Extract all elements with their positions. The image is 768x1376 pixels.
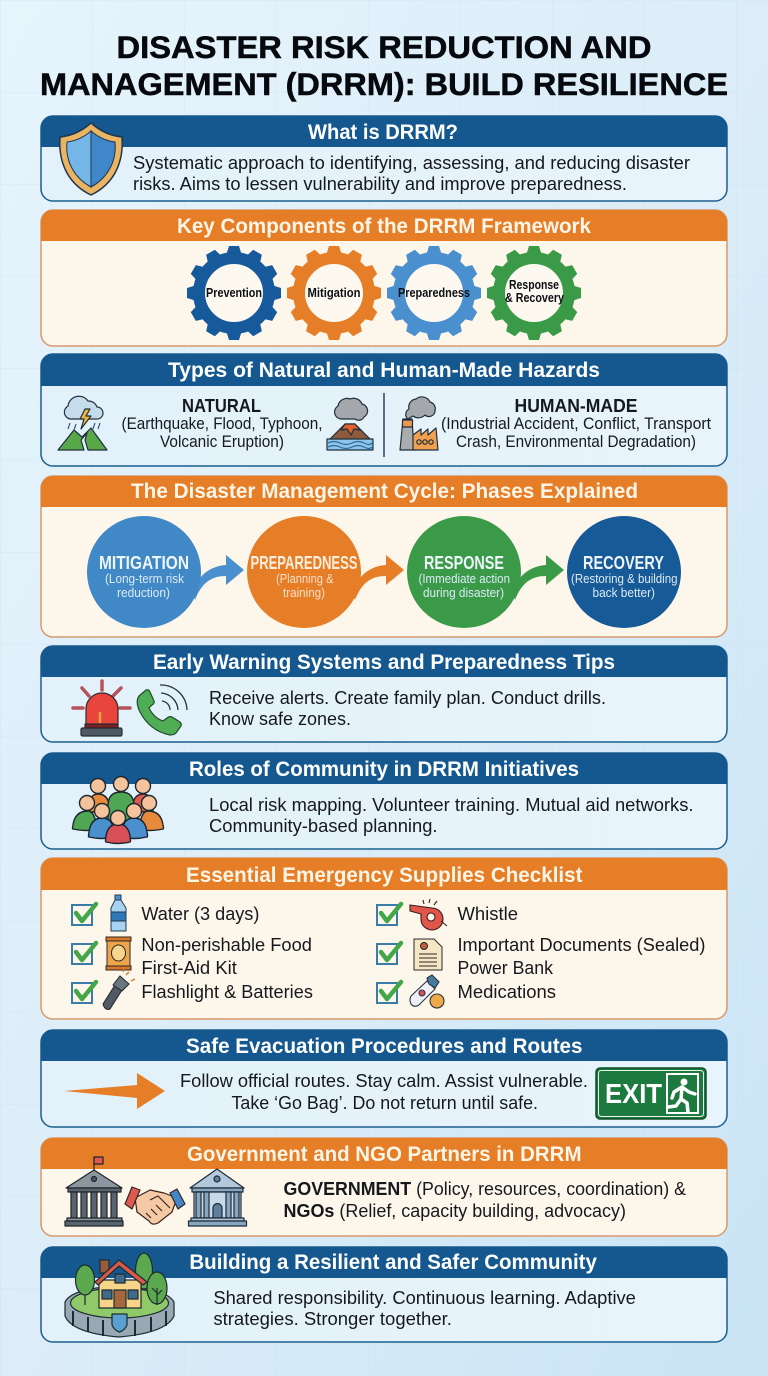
- heading: The Disaster Management Cycle: Phases Explained: [131, 479, 638, 503]
- text block: Shared responsibility. Continuous learning. Adaptive: [213, 1288, 636, 1308]
- icon: flashlight: [103, 968, 135, 1009]
- gear: response and recovery: Response: [509, 277, 559, 292]
- phase: recovery: (Restoring & building: [571, 572, 678, 586]
- left checklist text: Water (3 days): [141, 904, 259, 924]
- text block: [180, 1071, 588, 1113]
- phase: preparedness: PREPAREDNESS: [250, 553, 358, 573]
- panel: key components: [41, 210, 727, 346]
- icon: whistle: [410, 899, 447, 930]
- title: DISASTER RISK REDUCTION AND: [116, 29, 652, 65]
- text block: [133, 153, 690, 194]
- human-made hazards text: (Industrial Accident, Conflict, Transport: [441, 414, 711, 433]
- phase: mitigation: [87, 516, 201, 628]
- panel: emergency supplies checklist: [41, 858, 727, 1019]
- panel: early warning: [41, 646, 727, 742]
- divider: [383, 393, 385, 457]
- icon: water bottle: [111, 895, 126, 931]
- gear: response and recovery: & Recovery: [505, 290, 565, 305]
- panel: safe evacuation: [41, 1030, 727, 1127]
- panel: government and NGO partners: [41, 1138, 727, 1236]
- icon: storm and mountains: [58, 396, 107, 450]
- text block: [284, 1179, 686, 1221]
- icon: document: [414, 939, 442, 970]
- gear: mitigation: Mitigation: [308, 285, 361, 300]
- text block: Systematic approach to identifying, assessing, and reducing disaster: [133, 153, 690, 173]
- text block: [209, 688, 606, 729]
- title: MANAGEMENT (DRRM): BUILD RESILIENCE: [40, 66, 728, 102]
- text block: risks. Aims to lessen vulnerability and improve preparedness.: [133, 174, 627, 194]
- phase: response: (Immediate action: [418, 572, 510, 586]
- heading: Government and NGO Partners in DRRM: [187, 1142, 582, 1166]
- gear: preparedness: [387, 246, 481, 340]
- icon: government building: [65, 1157, 123, 1226]
- icon: food packet: [106, 937, 131, 970]
- heading: Key Components of the DRRM Framework: [177, 214, 591, 238]
- left checklist text: Non-perishable Food: [141, 935, 312, 955]
- phase: recovery: back better): [592, 586, 655, 600]
- natural hazards text: (Earthquake, Flood, Typhoon,: [122, 414, 322, 433]
- panel: disaster management cycle: [41, 476, 727, 637]
- natural hazards text: [122, 396, 322, 451]
- heading: Building a Resilient and Safer Community: [189, 1250, 597, 1274]
- icon: factory: [400, 397, 438, 450]
- right checklist text: [458, 904, 706, 1002]
- natural hazards text: NATURAL: [182, 396, 261, 416]
- icon: exit sign: EXIT: [605, 1078, 662, 1109]
- human-made hazards text: HUMAN-MADE: [514, 396, 638, 416]
- heading: Early Warning Systems and Preparedness Tips: [153, 650, 615, 674]
- gear: response and recovery: [487, 246, 581, 340]
- phase: recovery: RECOVERY: [583, 553, 664, 573]
- arrow: response to recovery: [513, 555, 564, 600]
- text block: Take ‘Go Bag’. Do not return until safe.: [232, 1093, 538, 1113]
- heading: Essential Emergency Supplies Checklist: [186, 863, 582, 887]
- right checklist text: Power Bank: [458, 958, 554, 978]
- title: [40, 29, 728, 102]
- icon: medications: [410, 975, 444, 1008]
- icon: siren: [73, 681, 130, 736]
- panel: roles of community: [41, 753, 727, 849]
- text block: Follow official routes. Stay calm. Assist vulnerable.: [180, 1071, 588, 1091]
- right checklist text: Whistle: [458, 904, 518, 924]
- phase: preparedness: training): [283, 586, 325, 600]
- phase: response: [407, 516, 521, 628]
- heading: Roles of Community in DRRM Initiatives: [189, 757, 579, 781]
- text block: NGOs (Relief, capacity building, advocacy): [284, 1201, 626, 1221]
- phase: mitigation: reduction): [117, 586, 170, 600]
- gear: preparedness: Preparedness: [398, 285, 470, 300]
- gear: prevention: [187, 246, 281, 340]
- text block: GOVERNMENT (Policy, resources, coordination) &: [284, 1179, 686, 1199]
- arrow: preparedness to response: [353, 555, 404, 600]
- right checklist text: Medications: [458, 982, 556, 1002]
- left checklist text: [141, 904, 313, 1002]
- right checklist text: Important Documents (Sealed): [458, 935, 706, 955]
- left checklist text: Flashlight & Batteries: [141, 982, 313, 1002]
- panel: hazards: [41, 354, 727, 466]
- panel: resilient community: [41, 1247, 727, 1342]
- human-made hazards text: [441, 396, 711, 451]
- human-made hazards text: Crash, Environmental Degradation): [456, 432, 696, 451]
- phase: mitigation: (Long-term risk: [105, 572, 185, 586]
- icon: protected house: [65, 1253, 174, 1337]
- icon: NGO building: [188, 1169, 246, 1226]
- natural hazards text: Volcanic Eruption): [160, 432, 284, 451]
- text block: Know safe zones.: [209, 709, 351, 729]
- text block: Community-based planning.: [209, 816, 438, 836]
- heading: What is DRRM?: [308, 120, 458, 144]
- arrow: mitigation to preparedness: [193, 555, 244, 600]
- text block: [213, 1288, 636, 1329]
- phase: preparedness: (Planning &: [276, 572, 334, 586]
- icon: shield: [60, 123, 122, 195]
- phase: mitigation: MITIGATION: [99, 553, 189, 573]
- text block: strategies. Stronger together.: [213, 1309, 452, 1329]
- gear: prevention: Prevention: [206, 285, 262, 300]
- checkboxes: [72, 904, 401, 1003]
- icon: volcano: [327, 398, 373, 450]
- left checklist text: First-Aid Kit: [141, 958, 237, 978]
- heading: Safe Evacuation Procedures and Routes: [186, 1034, 583, 1058]
- gear: mitigation: [287, 246, 381, 340]
- phase: response: during disaster): [423, 586, 504, 600]
- arrow: evacuation direction: [64, 1073, 165, 1109]
- icon: handshake: [125, 1187, 185, 1224]
- icon: phone: [137, 685, 187, 735]
- icon: community group: [72, 776, 164, 844]
- phase: recovery: [567, 516, 681, 628]
- text block: Receive alerts. Create family plan. Conduct drills.: [209, 688, 606, 708]
- icon: exit sign: [596, 1068, 706, 1119]
- heading: Types of Natural and Human-Made Hazards: [168, 358, 600, 382]
- text block: Local risk mapping. Volunteer training. Mutual aid networks.: [209, 795, 694, 815]
- text block: [209, 795, 694, 836]
- panel: what is DRRM: [41, 116, 727, 201]
- phase: response: RESPONSE: [424, 553, 504, 573]
- phase: preparedness: [247, 516, 361, 628]
